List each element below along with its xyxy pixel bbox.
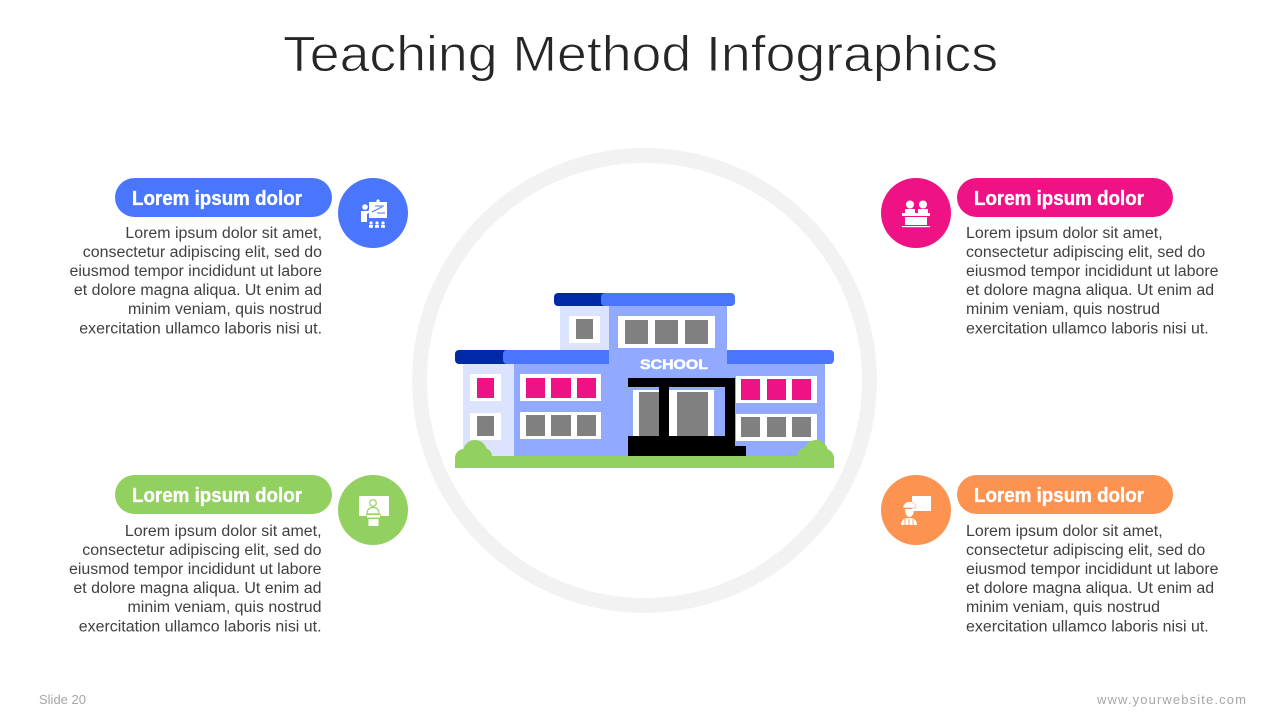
body text: top right: eiusmod tempor incididunt ut labore (966, 263, 1219, 280)
body text: bottom left: et dolore magna aliqua. Ut enim ad (73, 580, 322, 597)
body text: top left: consectetur adipiscing elit, sed do (83, 244, 322, 261)
pill heading: top left: Lorem ipsum dolor (132, 187, 302, 210)
body text: top left: Lorem ipsum dolor sit amet, (125, 225, 322, 242)
body text: top left: minim veniam, quis nostrud (128, 301, 322, 318)
body text: top right: exercitation ullamco laboris nisi ut. (966, 320, 1209, 338)
icon: lecturer at podium with screen (338, 475, 408, 545)
body text: bottom left: consectetur adipiscing elit, sed do (82, 542, 322, 559)
body text: bottom right: Lorem ipsum dolor sit amet, (966, 523, 1163, 540)
body text: bottom left (69, 523, 322, 636)
icon: two speakers at a desk (881, 178, 951, 248)
school building illustration: SCHOOL (640, 357, 708, 372)
body text: bottom right: et dolore magna aliqua. Ut enim ad (966, 580, 1214, 597)
icon: teacher at presentation board (338, 178, 408, 248)
body text: bottom left: minim veniam, quis nostrud (128, 599, 322, 616)
body text: top right: et dolore magna aliqua. Ut enim ad (966, 282, 1214, 299)
central ring (420, 156, 870, 606)
panel: top right (881, 178, 1219, 338)
body text: bottom left: eiusmod tempor incididunt ut labore (69, 561, 322, 578)
pill heading: top left (115, 178, 332, 217)
body text: bottom left: exercitation ullamco laboris nisi ut. (79, 618, 322, 636)
pill heading: bottom right: Lorem ipsum dolor (974, 484, 1144, 507)
body text: bottom right: exercitation ullamco laboris nisi ut. (966, 618, 1209, 636)
pill heading: bottom left (115, 475, 332, 514)
footer: slide number: Slide 20 (39, 692, 86, 707)
body text: top right (966, 225, 1219, 338)
body text: bottom right (966, 523, 1219, 636)
panel: bottom left (69, 475, 408, 636)
body text: top right: Lorem ipsum dolor sit amet, (966, 225, 1163, 242)
pill heading: top right: Lorem ipsum dolor (974, 187, 1144, 210)
body text: bottom right: minim veniam, quis nostrud (966, 599, 1160, 616)
panel: bottom right (881, 475, 1219, 636)
icon: engineer with speech board (881, 475, 951, 545)
body text: bottom left: Lorem ipsum dolor sit amet, (125, 523, 322, 540)
body text: top left: eiusmod tempor incididunt ut labore (70, 263, 322, 280)
pill heading: bottom right (957, 475, 1173, 514)
pill heading: bottom left: Lorem ipsum dolor (132, 484, 302, 507)
title: Teaching Method Infographics (283, 26, 998, 82)
body text: bottom right: eiusmod tempor incididunt ut labore (966, 561, 1219, 578)
body text: top right: consectetur adipiscing elit, sed do (966, 244, 1205, 261)
footer: website: www.yourwebsite.com (1096, 692, 1246, 707)
school building illustration (455, 293, 834, 468)
body text: top left: et dolore magna aliqua. Ut enim ad (74, 282, 322, 299)
pill heading: top right (957, 178, 1173, 217)
body text: top right: minim veniam, quis nostrud (966, 301, 1160, 318)
body text: bottom right: consectetur adipiscing elit, sed do (966, 542, 1205, 559)
body text: top left: exercitation ullamco laboris nisi ut. (79, 320, 322, 338)
body text: top left (70, 225, 322, 338)
panel: top left (70, 178, 408, 338)
